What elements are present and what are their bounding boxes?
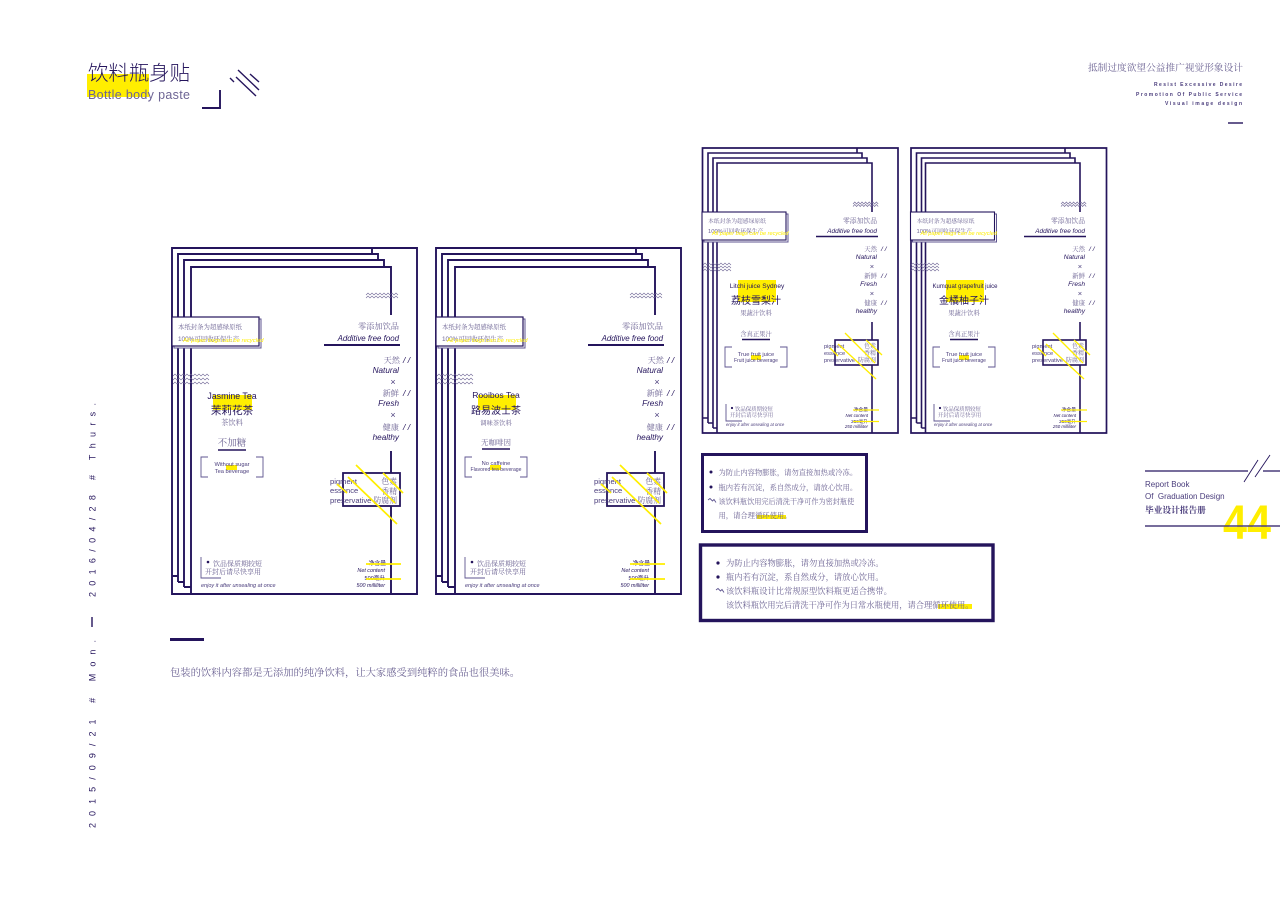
natural fresh healthy list: × <box>1078 289 1082 298</box>
net content: 净含量 <box>369 559 386 567</box>
vertical date text: 2016/04/28 # Thurs. <box>88 403 98 597</box>
natural fresh healthy list: / / <box>402 388 412 398</box>
real fruit juice note: True fruit juice <box>738 352 774 358</box>
natural fresh healthy list: Natural <box>373 366 399 375</box>
shelf life note: 饮品保质期较短 <box>943 405 981 413</box>
net content: 250毫升 <box>851 418 868 425</box>
natural fresh healthy list: Fresh <box>642 399 663 408</box>
panel: rooibos tea label <box>436 248 681 594</box>
natural fresh healthy list: × <box>1078 262 1082 271</box>
vertical date text <box>88 403 98 828</box>
additive free heading: Additive free food <box>601 334 664 343</box>
natural fresh healthy list: 天然 <box>648 355 665 365</box>
no additives box: 香精 <box>645 486 661 496</box>
natural fresh healthy list: 新鲜 <box>647 388 663 398</box>
no caffeine note: Flavored tea beverage <box>471 467 522 473</box>
product name <box>730 280 785 317</box>
no sugar note <box>201 437 263 477</box>
layered frame <box>172 248 417 594</box>
additive free heading: Additive free food <box>1034 228 1085 235</box>
no additives box <box>594 465 667 524</box>
no additives box: pigment <box>824 344 845 350</box>
natural fresh healthy list: Fresh <box>1068 281 1085 288</box>
product name: Jasmine Tea <box>207 391 257 401</box>
shelf life note <box>201 557 276 589</box>
panel: usage notes large: 该饮料瓶设计比常规原型饮料瓶更适合携带。 <box>726 586 892 596</box>
shelf life note <box>465 557 540 589</box>
additive free heading: Additive free food <box>337 334 400 343</box>
natural fresh healthy list <box>856 244 888 315</box>
no additives box: preservative <box>824 358 855 364</box>
shelf life note: 饮品保质期较短 <box>213 559 262 568</box>
product name <box>932 280 998 317</box>
recycled paper sticker: 本纸封条为超感绿原纸 <box>916 217 975 225</box>
wave icons <box>173 293 398 384</box>
report book block with page number: Report Book <box>1145 480 1190 489</box>
no additives box: 香精 <box>381 486 397 496</box>
recycled paper sticker: All paper bags can be recycled <box>920 231 998 237</box>
additive free heading: 零添加饮品 <box>358 321 399 331</box>
no additives box: pigment <box>330 477 358 486</box>
product name: Kumquat grapefruit juice <box>932 284 998 290</box>
natural fresh healthy list: 新鲜 <box>864 271 878 280</box>
real fruit juice note: 含真正果汁 <box>948 329 980 338</box>
project title top right: Promotion Of Public Service <box>1136 92 1242 98</box>
product name: 调味茶饮料 <box>480 418 512 427</box>
corner bracket and diagonal lines icon <box>202 70 259 108</box>
no additives box: pigment <box>594 477 622 486</box>
natural fresh healthy list: healthy <box>373 433 400 442</box>
panel: usage notes large <box>700 545 993 620</box>
recycled paper sticker <box>436 317 528 348</box>
no additives box: preservative <box>330 496 371 505</box>
net content: Net content <box>1054 413 1077 418</box>
product name <box>207 391 257 427</box>
panel: usage notes small: 为防止内容物膨胀，请勿直接加热或冷冻。 <box>718 468 857 478</box>
natural fresh healthy list: / / <box>880 273 888 280</box>
natural fresh healthy list: × <box>654 410 660 420</box>
page title <box>87 62 190 102</box>
natural fresh healthy list: Fresh <box>378 399 399 408</box>
net content: Net content <box>621 568 649 574</box>
project title top right: Resist Excessive Desire <box>1154 82 1242 88</box>
natural fresh healthy list: Natural <box>856 254 878 261</box>
no additives box <box>330 465 403 524</box>
real fruit juice note: True fruit juice <box>946 352 982 358</box>
no additives box: essence <box>824 351 845 357</box>
panel: litchi juice label <box>702 148 898 433</box>
panel: usage notes large: 瓶内若有沉淀，系自然成分，请放心饮用。 <box>726 572 884 583</box>
additive free heading <box>588 321 664 345</box>
project title top right: Visual image design <box>1165 101 1242 107</box>
recycled paper sticker: All paper bags can be recycled <box>182 338 264 344</box>
product name: 金橘柚子汁 <box>939 294 989 307</box>
shelf life note <box>726 404 785 427</box>
natural fresh healthy list <box>1064 244 1096 315</box>
no additives box: preservative <box>1032 358 1063 364</box>
no additives box <box>824 333 882 379</box>
shelf life note: 开封后请尽快享用 <box>205 567 261 576</box>
natural fresh healthy list: 健康 <box>1072 298 1086 307</box>
recycled paper sticker <box>172 317 264 348</box>
additive free heading: 零添加饮品 <box>1051 216 1085 225</box>
additive free heading <box>324 321 400 345</box>
no caffeine note: No caffeine <box>482 461 510 467</box>
shelf life note: 开封后请尽快享用 <box>730 411 773 419</box>
net content: 500 milliliter <box>621 583 649 589</box>
natural fresh healthy list: 健康 <box>647 422 663 432</box>
panel: usage notes small: 瓶内若有沉淀，系自然成分，请放心饮用。 <box>718 483 857 493</box>
real fruit juice note: Fruit juice beverage <box>942 358 986 364</box>
no sugar note: Without sugar <box>214 462 250 468</box>
natural fresh healthy list: Fresh <box>860 281 877 288</box>
natural fresh healthy list: Natural <box>637 366 663 375</box>
no additives box: 色素 <box>1072 342 1084 350</box>
net content: 净含量 <box>1062 406 1076 413</box>
natural fresh healthy list: × <box>654 377 660 387</box>
no caffeine note <box>465 437 527 477</box>
page title: Bottle body paste <box>88 88 190 102</box>
layered frame <box>436 248 681 594</box>
real fruit juice note: 含真正果汁 <box>740 329 772 338</box>
natural fresh healthy list: × <box>870 289 874 298</box>
recycled paper sticker <box>910 212 998 242</box>
product name: 茉莉花茶 <box>211 404 254 417</box>
no caffeine note: 无咖啡因 <box>481 437 511 447</box>
panel: usage notes large: 为防止内容物膨胀，请勿直接加热或冷冻。 <box>726 558 884 569</box>
natural fresh healthy list: 新鲜 <box>383 388 399 398</box>
additive free heading <box>1024 216 1086 236</box>
net content: 250毫升 <box>1059 418 1076 425</box>
layered frame <box>702 148 898 433</box>
recycled paper sticker <box>702 212 789 242</box>
net content: Net content <box>357 568 385 574</box>
additive free heading <box>816 216 878 236</box>
panel: usage notes small: 用，请合理循环使用。 <box>718 511 791 521</box>
recycled paper sticker: 100%可回收环保生产 <box>916 227 972 235</box>
project title top right <box>1088 61 1243 123</box>
net content: 净含量 <box>854 406 868 413</box>
natural fresh healthy list: / / <box>666 355 676 365</box>
natural fresh healthy list: healthy <box>856 308 878 315</box>
product name: Rooibos Tea <box>472 390 520 400</box>
product name: 茶饮料 <box>221 418 244 427</box>
no additives box: essence <box>1032 351 1053 357</box>
recycled paper sticker: All paper bags can be recycled <box>711 231 789 237</box>
panel: kumquat grapefruit juice label <box>910 148 1106 433</box>
no additives box: 防腐剂 <box>1066 356 1084 364</box>
natural fresh healthy list: / / <box>402 355 412 365</box>
shelf life note: 饮品保质期较短 <box>735 405 773 413</box>
no additives box: 防腐剂 <box>374 495 397 505</box>
panel: usage notes large: 该饮料瓶饮用完后清洗干净可作为日常水瓶使用，请合理循环使用。 <box>726 600 974 611</box>
recycled paper sticker: 本纸封条为超感绿原纸 <box>178 322 243 331</box>
natural fresh healthy list: × <box>390 410 396 420</box>
natural fresh healthy list: / / <box>402 422 412 432</box>
report book block with page number: 毕业设计报告册 <box>1145 504 1206 515</box>
natural fresh healthy list: / / <box>1088 273 1096 280</box>
additive free heading: Additive free food <box>826 228 877 235</box>
natural fresh healthy list: 天然 <box>864 244 878 253</box>
shelf life note: 开封后请尽快享用 <box>470 567 526 576</box>
recycled paper sticker: 100%可回收环保生产 <box>442 334 504 343</box>
shelf life note <box>934 404 993 427</box>
natural fresh healthy list: / / <box>880 300 888 307</box>
natural fresh healthy list: / / <box>1088 246 1096 253</box>
natural fresh healthy list: 新鲜 <box>1072 271 1086 280</box>
product name: 荔枝雪梨汁 <box>731 294 781 307</box>
no additives box: 香精 <box>1072 349 1084 357</box>
report book block with page number: 44 <box>1223 497 1271 550</box>
net content: 250 milliliter <box>844 424 869 429</box>
no additives box: 香精 <box>864 349 876 357</box>
natural fresh healthy list: 健康 <box>383 422 399 432</box>
natural fresh healthy list: healthy <box>1064 308 1086 315</box>
no sugar note: 不加糖 <box>218 437 247 449</box>
project title top right: 抵制过度欲望公益推广视觉形象设计 <box>1088 61 1243 74</box>
caption with accent bar <box>170 638 520 679</box>
net content <box>357 559 401 589</box>
natural fresh healthy list: healthy <box>637 433 664 442</box>
natural fresh healthy list: Natural <box>1064 254 1086 261</box>
real fruit juice note <box>725 329 787 367</box>
product name: Litchi juice Sydney <box>730 283 785 290</box>
recycled paper sticker: 100%可回收环保生产 <box>708 227 764 235</box>
shelf life note: enjoy it after unsealing at once <box>726 422 785 427</box>
no additives box: 防腐剂 <box>858 356 876 364</box>
product name: 果蔬汁饮料 <box>740 308 772 317</box>
additive free heading: 零添加饮品 <box>622 321 663 331</box>
net content: 净含量 <box>633 559 650 567</box>
caption with accent bar: 包装的饮料内容都是无添加的纯净饮料，让大家感受到纯粹的食品也很美味。 <box>170 666 520 679</box>
no additives box: 色素 <box>381 476 397 486</box>
report book block with page number <box>1145 455 1280 550</box>
net content: 500毫升 <box>364 574 385 582</box>
net content <box>621 559 665 589</box>
net content: 500 milliliter <box>357 583 385 589</box>
real fruit juice note: Fruit juice beverage <box>734 358 778 364</box>
no additives box: 色素 <box>864 342 876 350</box>
natural fresh healthy list: 健康 <box>864 298 878 307</box>
natural fresh healthy list <box>637 355 676 442</box>
no additives box: preservative <box>594 496 635 505</box>
page title: 饮料瓶身贴 <box>88 62 190 85</box>
net content: 500毫升 <box>628 574 649 582</box>
no additives box: essence <box>330 486 358 495</box>
product name: 果蔬汁饮料 <box>948 308 980 317</box>
no additives box <box>1032 333 1090 379</box>
natural fresh healthy list: / / <box>666 422 676 432</box>
panel: usage notes small: 该饮料瓶饮用完后清洗干净可作为密封瓶使 <box>718 497 854 506</box>
additive free heading: 零添加饮品 <box>843 216 877 225</box>
net content: Net content <box>846 413 869 418</box>
wave icons <box>703 202 878 271</box>
real fruit juice note <box>933 329 995 367</box>
report book block with page number: Of Graduation Design <box>1145 492 1225 501</box>
shelf life note: 开封后请尽快享用 <box>938 411 981 419</box>
recycled paper sticker: 100%可回收环保生产 <box>178 334 240 343</box>
panel: jasmine tea label <box>172 248 417 594</box>
natural fresh healthy list: × <box>870 262 874 271</box>
net content: 250 milliliter <box>1052 424 1077 429</box>
no additives box: pigment <box>1032 344 1053 350</box>
shelf life note: 饮品保质期较短 <box>477 559 526 568</box>
recycled paper sticker: 本纸封条为超感绿原纸 <box>442 322 507 331</box>
no sugar note: Tea beverage <box>215 469 249 475</box>
net content <box>1052 406 1087 429</box>
natural fresh healthy list: / / <box>666 388 676 398</box>
natural fresh healthy list: × <box>390 377 396 387</box>
recycled paper sticker: 本纸封条为超感绿原纸 <box>708 217 766 225</box>
product name: 路易波士茶 <box>471 404 521 417</box>
wave icons <box>437 293 662 384</box>
product name <box>471 390 521 427</box>
layered frame <box>911 148 1106 433</box>
natural fresh healthy list: / / <box>1088 300 1096 307</box>
no additives box: 色素 <box>645 476 661 486</box>
natural fresh healthy list <box>373 355 412 442</box>
shelf life note: enjoy it after unsealing at once <box>201 583 276 589</box>
no additives box: essence <box>594 486 622 495</box>
natural fresh healthy list: / / <box>880 246 888 253</box>
recycled paper sticker: All paper bags can be recycled <box>446 338 528 344</box>
no additives box: 防腐剂 <box>638 495 661 505</box>
panel: usage notes small <box>702 454 866 532</box>
shelf life note: enjoy it after unsealing at once <box>465 583 540 589</box>
natural fresh healthy list: 天然 <box>1072 244 1086 253</box>
shelf life note: enjoy it after unsealing at once <box>934 422 993 427</box>
wave icons <box>911 202 1086 271</box>
natural fresh healthy list: 天然 <box>384 355 401 365</box>
vertical date text: 2015/09/21 # Mon. <box>88 640 98 828</box>
net content <box>844 406 879 429</box>
